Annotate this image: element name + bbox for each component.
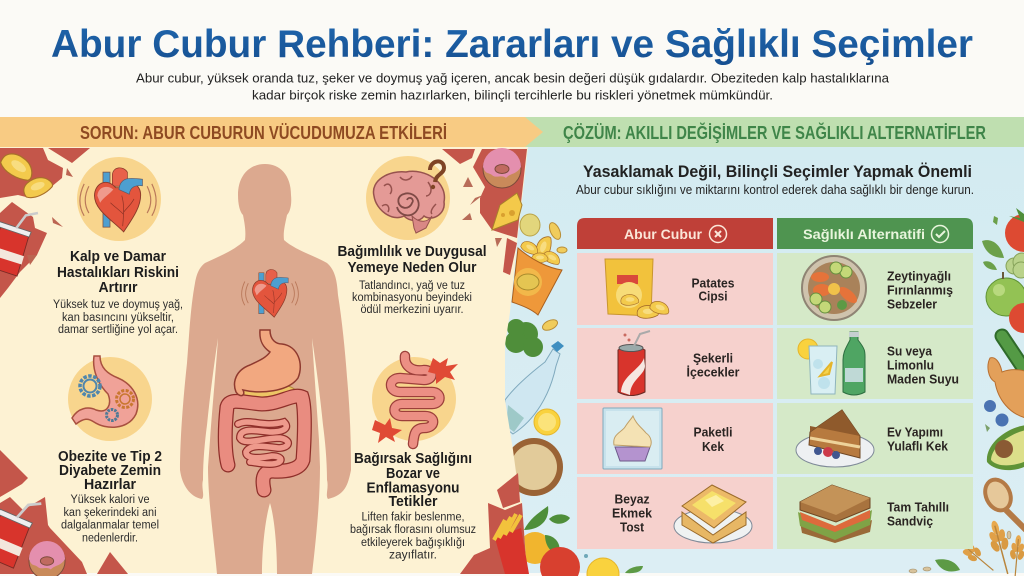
intro text [136, 72, 889, 102]
row 2: soda [577, 328, 773, 399]
heading [338, 244, 486, 276]
icon: vegetable bowl [802, 256, 866, 320]
heading: Bozar ve [386, 466, 440, 482]
foods on left edge of solution panel [505, 214, 643, 576]
description: kombinasyonu beyindeki [352, 292, 472, 304]
wooden spoon [978, 473, 1024, 530]
icon: brain [366, 156, 450, 240]
cucumber [1002, 336, 1024, 372]
row 2: soda: Şekerli [693, 350, 733, 366]
header band: problem: SORUN: ABUR CUBURUN VÜCUDUMUZA ETKİLERİ [80, 123, 447, 143]
row 1: vegetables [777, 253, 973, 325]
comparison table [577, 218, 973, 549]
heading: Hastalıkları Riskini [57, 265, 179, 281]
bottom lemon and leaf [584, 554, 643, 576]
organ: large intestine [225, 396, 304, 490]
row 4: whole grain sandwich: Sandviç [887, 514, 933, 528]
description [352, 280, 472, 316]
organ: small intestine [238, 422, 288, 464]
icon: toast [674, 485, 752, 543]
row 1: vegetables: Zeytinyağlı [887, 268, 951, 284]
icon: stomach with gears [68, 356, 152, 441]
heading: Kalp ve Damar [70, 249, 166, 265]
row 3: packaged cake [577, 403, 773, 474]
table header: junk food: Abur Cubur [624, 226, 703, 242]
organ: heart [242, 270, 298, 317]
subheading: Yasaklamak Değil, Bilinçli Seçimler Yapmak Önemli [583, 162, 972, 181]
row 3: oat cake: Ev Yapımı [887, 424, 943, 440]
chips bag [512, 234, 562, 315]
description [61, 494, 159, 544]
description: Yüksek tuz ve doymuş yağ, [53, 299, 183, 311]
row 1: chips: Cipsi [698, 288, 728, 304]
intro text: kadar birçok riske zemin hazırlarken, bilinçli tercihlerle bu riskleri yönetmek mümkündür. [252, 88, 773, 102]
water bottle [505, 341, 564, 434]
row 2: water: Limonlu [887, 358, 934, 372]
heading [58, 449, 162, 493]
row 3: oat cake: Yulaflı Kek [887, 438, 949, 454]
heading: Obezite ve Tip 2 [58, 449, 162, 465]
heading: Bağımlılık ve Duygusal [338, 244, 486, 260]
heading: Artırır [98, 280, 138, 296]
icon: oat cake [796, 410, 874, 467]
row 4: whole grain sandwich [777, 477, 973, 549]
heading: Hazırlar [84, 477, 136, 493]
organ: stomach [235, 330, 300, 396]
row 3: packaged cake: Paketli [694, 424, 732, 440]
broccoli [1006, 253, 1024, 278]
icon: chips bag [605, 259, 671, 318]
row 4: white toast: Ekmek [612, 506, 653, 520]
broccoli [505, 319, 543, 357]
description [53, 299, 183, 336]
icon: soda can [618, 331, 650, 396]
row 2: water: Su veya [887, 344, 933, 358]
table header: healthy alternative: Sağlıklı Alternatifi [803, 226, 925, 242]
row 2: water: Maden Suyu [887, 372, 959, 386]
subheading description: Abur cubur sıklığını ve miktarını kontrol ederek daha sağlıklı bir denge kurun. [576, 183, 974, 197]
row 1: chips: Patates [692, 276, 734, 290]
bottom leaf [909, 531, 1011, 573]
description: Liften fakir beslenme, [362, 512, 464, 524]
icon: heart [77, 157, 161, 241]
description: kan şekerindeki ani [64, 507, 156, 519]
description: bağırsak florasını olumsuz [350, 524, 476, 536]
row 4: whole grain sandwich: Tam Tahıllı [887, 500, 949, 514]
panel: obesity and diabetes [58, 356, 162, 544]
panel: gut health [350, 356, 476, 562]
table header: junk food [577, 218, 773, 249]
row 1: chips [577, 253, 773, 325]
icon: sandwich [798, 485, 872, 543]
organ: pancreas [240, 384, 296, 400]
description: ödül merkezini uyarır. [360, 304, 464, 316]
description: damar sertliğine yol açar. [58, 324, 178, 336]
heading: Tetikler [388, 494, 438, 510]
row 4: white toast: Beyaz [614, 492, 650, 506]
description [350, 512, 476, 562]
title: Abur Cubur Rehberi: Zararları ve Sağlıklı Seçimler [51, 23, 973, 66]
tomato 2 [1009, 303, 1024, 333]
heading: Diyabete Zemin [59, 463, 161, 479]
row 3: packaged cake: Kek [702, 439, 725, 454]
body silhouette [180, 164, 351, 574]
row 4: white toast: Tost [620, 520, 645, 534]
icon: inflamed intestine [372, 356, 458, 444]
body silhouette with organs [180, 164, 351, 574]
avocado [987, 425, 1024, 470]
heading: Yemeye Neden Olur [348, 260, 477, 276]
description: dalgalanmalar temel [61, 520, 159, 532]
description: zayıflatır. [389, 550, 437, 562]
heading [354, 451, 472, 510]
leaves and produce [519, 506, 580, 576]
panel: problem background [0, 147, 528, 573]
tomato [1005, 208, 1024, 252]
icon: packaged cupcake [603, 408, 662, 469]
description: etkileyerek bağışıklığı [361, 537, 465, 549]
icon: cheese [492, 193, 522, 230]
blueberries [984, 400, 1008, 432]
heading: Bağırsak Sağlığını [354, 451, 472, 467]
row 1: vegetables: Sebzeler [887, 296, 937, 312]
panel: addiction [338, 156, 486, 316]
heading [57, 249, 179, 296]
panel: solution background [490, 147, 1024, 573]
description: nedenlerdir. [82, 532, 138, 544]
panel: heart risk [53, 157, 183, 336]
wheat [954, 518, 1024, 576]
loose chips [520, 214, 567, 332]
table header: healthy alternative [777, 218, 973, 249]
red burst decorations with junk food [0, 148, 529, 576]
header band: solution [520, 117, 1024, 147]
intro text: Abur cubur, yüksek oranda tuz, şeker ve doymuş yağ içeren, ancak besin değeri düşük gıdalardır. Obeziteden kalp hastalıklarına [136, 72, 889, 86]
heading: Enflamasyonu [366, 480, 460, 496]
foods on right edge of solution panel [909, 208, 1024, 576]
row 1: vegetables: Fırınlanmış [887, 282, 953, 298]
row 4: white toast [577, 477, 773, 549]
description: Yüksek kalori ve [70, 494, 150, 506]
row 2: soda: İçecekler [686, 364, 740, 380]
lemon [534, 409, 560, 435]
description: Tatlandıncı, yağ ve tuz [359, 280, 465, 292]
row 2: water [777, 328, 973, 399]
row 3: oat cake [777, 403, 973, 474]
description: kan basıncını yükseltir, [62, 312, 174, 324]
grain bowl [505, 438, 563, 496]
icon: fries [494, 514, 529, 574]
header band: problem [0, 117, 543, 147]
apple [986, 272, 1024, 316]
sweet potato [988, 358, 1024, 418]
leaves [982, 216, 1004, 270]
icon: water and lemon [798, 332, 865, 395]
